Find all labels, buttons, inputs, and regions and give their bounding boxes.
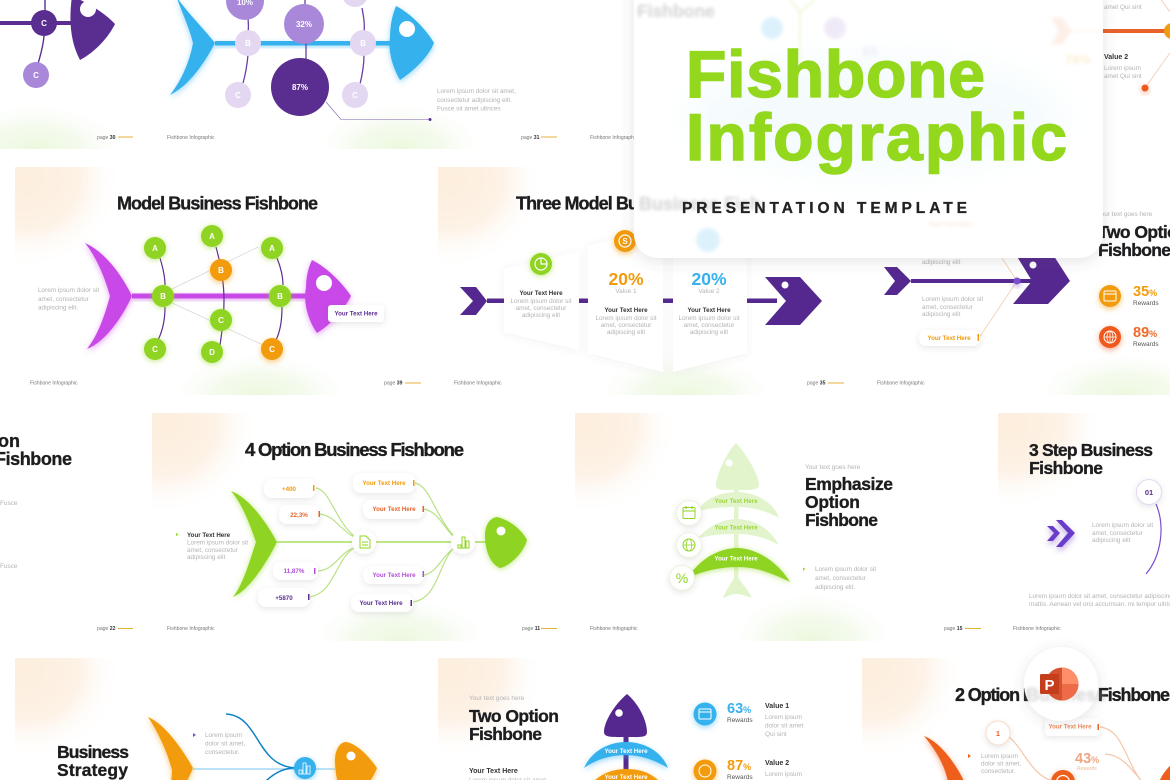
pill +5870: +5870 xyxy=(275,595,293,602)
orange rib xyxy=(590,769,664,780)
heading: Three Model Business Fishbone xyxy=(516,194,766,214)
text bottom: amet, consectetur xyxy=(922,304,974,311)
slide fragment: left heading row 3: Fusce xyxy=(0,563,18,570)
node 32% xyxy=(284,4,324,44)
label box: Your Text Here xyxy=(334,310,378,318)
side text: amet, consectetur xyxy=(38,296,90,303)
side text xyxy=(176,532,248,561)
slide: top right orange fishbone xyxy=(1103,0,1170,92)
node top right xyxy=(342,0,368,7)
head fragment xyxy=(1158,764,1170,780)
node C dark: C xyxy=(41,19,47,28)
side text: amet, consectetur xyxy=(187,547,239,554)
stat 35%: 35% xyxy=(1133,284,1157,300)
heading: Fishbone xyxy=(1098,240,1170,260)
stat 63% xyxy=(694,701,753,726)
head xyxy=(485,517,527,568)
icon: double chevron xyxy=(1047,520,1075,547)
arrow tail xyxy=(460,287,487,315)
PowerPoint badge xyxy=(1024,647,1106,721)
node B left: B xyxy=(245,39,251,48)
bullet text: Lorem ipsum dolor sit xyxy=(815,566,876,573)
pill 22,3%: 22,3% xyxy=(290,512,308,519)
blurred content behind card: Your Text Here xyxy=(928,221,972,228)
panel 3: Lorem ipsum dolor sit xyxy=(678,315,740,322)
highlighted rib xyxy=(688,548,790,582)
heading: Business xyxy=(57,742,129,762)
side text: Your Text Here xyxy=(187,532,231,539)
node C light: C xyxy=(33,71,39,80)
head xyxy=(335,742,377,780)
tail xyxy=(148,717,193,780)
icon: dollar xyxy=(614,230,636,252)
spine xyxy=(193,768,335,770)
text: dolor sit amet, xyxy=(205,740,245,748)
pills xyxy=(264,479,316,498)
label red: Your Text Here xyxy=(372,506,416,513)
subtitle: PRESENTATION TEMPLATE xyxy=(682,200,967,217)
callout text: Fusce sit amet ultrices xyxy=(437,106,501,112)
blurred content behind card: 78% xyxy=(1065,52,1091,67)
spine and bones xyxy=(38,0,45,64)
nodes: B xyxy=(277,292,283,301)
body text xyxy=(1029,593,1170,608)
arrow tail xyxy=(884,267,911,295)
panel 3: amet, consectetur xyxy=(684,322,735,329)
node xyxy=(1164,23,1170,39)
footer: Fishbone Infographic xyxy=(590,135,638,141)
spine xyxy=(277,541,486,543)
nodes: C xyxy=(218,316,224,325)
step 01: 01 xyxy=(1145,488,1153,497)
heading xyxy=(805,474,893,530)
slide: Two Option Fishbone (bottom) xyxy=(469,694,804,780)
bones xyxy=(158,247,283,345)
callout text xyxy=(437,88,516,112)
pills: +400 xyxy=(282,486,297,493)
value 2: Value 2 xyxy=(765,760,789,767)
skeleton xyxy=(697,443,779,598)
slide 30: purple fish fragment xyxy=(0,0,215,141)
footer xyxy=(590,626,981,632)
slide: Business Strategy fishbone xyxy=(57,714,377,780)
tail xyxy=(231,491,277,597)
bullet text: adipiscing elit. xyxy=(815,584,855,591)
node 87% xyxy=(271,58,329,116)
footer xyxy=(97,135,215,141)
footer: Fishbone Infographic xyxy=(877,380,925,386)
stat 43%: 43% xyxy=(1075,751,1099,767)
arrow head xyxy=(765,277,822,325)
text: adipiscing elit xyxy=(1092,537,1131,544)
spine xyxy=(1103,29,1170,33)
panel 1 xyxy=(504,252,579,350)
head xyxy=(305,260,351,333)
side text: adipiscing elit xyxy=(187,554,226,561)
footer: Fishbone Infographic xyxy=(30,380,78,386)
rib labels: Your Text Here xyxy=(714,498,758,505)
footer: page 15 xyxy=(944,626,963,632)
title glow xyxy=(685,55,1065,175)
node B right: B xyxy=(360,39,366,48)
panel 1: adipiscing elit xyxy=(522,312,560,319)
footer: page 11 xyxy=(522,626,540,632)
text: Your Text Here xyxy=(469,768,518,775)
footer: Fishbone Infographic xyxy=(1013,626,1061,632)
footer: page 39 xyxy=(384,380,403,386)
value 1: Lorem ipsum xyxy=(765,714,802,721)
blurred content behind card: adipiscing elit xyxy=(922,259,961,266)
slide: 3 Step Business Fishbone xyxy=(1013,440,1170,632)
label orange: Your Text Here xyxy=(362,480,406,487)
text: Your Text Here xyxy=(604,307,648,314)
text upper: amet Qui sint xyxy=(1104,4,1142,11)
value 2 xyxy=(1104,54,1142,80)
value 2 xyxy=(765,760,802,778)
value 1: dolor sit amet xyxy=(765,722,804,730)
tail xyxy=(924,736,968,780)
arrow head xyxy=(1013,250,1070,304)
node C light xyxy=(23,62,49,88)
value 2: Value 2 xyxy=(1104,54,1128,61)
title card xyxy=(634,0,1103,266)
stat 89%: Rewards xyxy=(1133,341,1159,348)
label purple: Your Text Here xyxy=(359,600,403,607)
value 1: Value 1 xyxy=(765,703,789,710)
nodes: A xyxy=(269,244,275,253)
panel 1: Lorem ipsum dolor sit xyxy=(510,298,572,305)
footer: Fishbone Infographic xyxy=(167,626,215,632)
panel 2: amet, consectetur xyxy=(601,322,652,329)
nodes: C xyxy=(152,345,158,354)
tail xyxy=(170,0,215,95)
text bottom: Lorem ipsum dolor sit xyxy=(922,296,983,303)
kicker: Your text goes here xyxy=(469,695,525,702)
value 2: Lorem ipsum xyxy=(765,771,802,778)
heading: Fishbone xyxy=(805,510,878,530)
pill 11,87%: 11,87% xyxy=(284,568,305,575)
text: Your Text Here xyxy=(687,307,731,314)
leader lines xyxy=(979,255,1017,338)
step 1 xyxy=(986,721,1010,745)
heading xyxy=(57,742,129,780)
footer: Fishbone Infographic xyxy=(590,626,638,632)
nodes: B xyxy=(218,266,224,275)
node B right xyxy=(350,30,376,56)
text: Lorem ipsum dolor sit xyxy=(1092,522,1153,529)
text xyxy=(193,732,245,756)
kicker: Your text goes here xyxy=(805,464,861,471)
slide: 2 Option Business Fishbone xyxy=(924,685,1170,780)
side text: Lorem ipsum dolor sit xyxy=(38,287,99,294)
node xyxy=(1051,770,1075,780)
nodes: D xyxy=(209,348,215,357)
node C left xyxy=(225,82,251,108)
callout leader xyxy=(326,102,432,121)
curves xyxy=(1009,727,1145,780)
text: Lorem ipsum xyxy=(981,753,1018,760)
callout text: consectetur adipiscing elit. xyxy=(437,97,512,104)
text: Your Text Here xyxy=(519,290,563,297)
slide: Three Model Business Fishbone xyxy=(454,194,844,386)
panel 3: adipiscing elit xyxy=(690,329,728,336)
text: amet, consectetur xyxy=(1092,530,1144,537)
text: consectetur. xyxy=(205,749,240,756)
head xyxy=(604,694,647,737)
spine xyxy=(911,279,1036,283)
value: 20% xyxy=(608,269,644,289)
footer: page 35 xyxy=(807,380,826,386)
footer: page 30 xyxy=(97,135,116,141)
stat 87%: 87% xyxy=(727,758,751,774)
node B left xyxy=(235,30,261,56)
panel 3 xyxy=(673,240,747,372)
text xyxy=(968,753,1021,775)
label box xyxy=(1045,718,1100,736)
panel 3: Value 2 xyxy=(698,288,720,295)
kicker: Your text goes here xyxy=(1097,211,1153,218)
rib labels xyxy=(714,498,758,562)
heading: 2 Option Business Fishbone xyxy=(955,685,1170,705)
blurred content behind card: 65 xyxy=(862,43,878,59)
nodes: A xyxy=(152,244,158,253)
side text xyxy=(38,287,99,312)
grey links xyxy=(170,247,263,345)
bullet text xyxy=(803,566,876,591)
label box: Your Text Here xyxy=(927,335,971,342)
slide fragment: left heading row 3: Fusce xyxy=(0,500,18,507)
panel 1: amet, consectetur xyxy=(516,305,567,312)
heading: 4 Option Business Fishbone xyxy=(245,439,464,460)
stat 89% xyxy=(1099,325,1159,348)
label red xyxy=(363,500,424,519)
label orange xyxy=(353,473,415,493)
slide fragment: left heading row 3: page 22 xyxy=(97,626,116,632)
footer xyxy=(167,626,557,632)
footer xyxy=(521,135,638,141)
heading: Option xyxy=(805,492,860,512)
icon: percent xyxy=(670,566,694,590)
step 1: 1 xyxy=(996,729,1000,738)
label box: Your Text Here xyxy=(1048,724,1092,730)
blue rib: Your Text Here xyxy=(604,748,648,755)
heading: Fishbone xyxy=(1029,458,1103,478)
footer: Fishbone Infographic xyxy=(167,135,215,141)
heading: Fishbone xyxy=(469,724,542,744)
blurred content behind card: Fishbone xyxy=(637,1,715,21)
value 2: Lorem ipsum xyxy=(1104,65,1141,72)
text: consectetur. xyxy=(981,768,1016,775)
tail xyxy=(85,243,132,349)
title: Infographic xyxy=(686,100,1067,174)
stat 35% xyxy=(1099,284,1159,307)
label box xyxy=(328,305,384,322)
node C dark xyxy=(31,10,57,36)
text: Lorem ipsum xyxy=(205,732,242,739)
spine xyxy=(487,298,777,303)
blue rib xyxy=(584,742,668,768)
node doc xyxy=(352,530,376,554)
node C right xyxy=(342,82,368,108)
heading: Model Business Fishbone xyxy=(117,194,318,214)
slide fragment: left heading row 3 xyxy=(0,431,133,632)
nodes: C xyxy=(269,345,275,354)
spine xyxy=(624,735,628,780)
slide: Model Business Fishbone xyxy=(30,194,421,386)
panel 2 xyxy=(588,228,663,372)
blurred content behind card xyxy=(637,0,1103,266)
pill 11,87% xyxy=(273,562,318,580)
label pink: Your Text Here xyxy=(372,572,416,579)
slide: Two Option Fishbone (right edge) xyxy=(1097,211,1170,348)
nodes: A xyxy=(209,232,215,241)
leader xyxy=(1145,0,1170,88)
curve xyxy=(1146,504,1161,574)
stat 63%: Rewards xyxy=(727,717,753,724)
side text: adipiscing elit. xyxy=(38,304,78,312)
stat 87% xyxy=(694,758,753,780)
nodes xyxy=(144,225,291,363)
stat 35%: Rewards xyxy=(1133,300,1159,307)
curves xyxy=(310,483,453,602)
heading xyxy=(469,706,559,744)
footer xyxy=(30,380,421,386)
icon: dollar: S xyxy=(622,237,628,246)
blurred content behind card: Business Fish xyxy=(639,194,761,214)
heading xyxy=(1029,440,1153,478)
bullet text: amet, consectetur xyxy=(815,575,867,582)
slide: purple arrow fishbone xyxy=(877,250,1070,386)
dot xyxy=(1142,84,1148,92)
pill 22,3% xyxy=(279,505,320,524)
text xyxy=(1092,522,1153,544)
label box xyxy=(919,330,980,346)
value 1: Qui sint xyxy=(765,731,787,738)
stat 43%: Rewards xyxy=(1077,766,1097,772)
step 01 xyxy=(1136,480,1162,504)
heading: 3 Step Business xyxy=(1029,440,1153,460)
spine xyxy=(132,294,307,298)
value 1 xyxy=(765,703,804,738)
heading: Strategy xyxy=(57,760,128,780)
node chart xyxy=(451,530,475,554)
icon: calendar xyxy=(676,500,702,526)
icon: globe xyxy=(676,532,702,558)
value 2: amet Qui sint xyxy=(1104,73,1142,80)
callout text: Lorem ipsum dolor sit amet, xyxy=(437,88,516,95)
node 32%: 32% xyxy=(296,20,312,29)
heading: Two Option xyxy=(469,706,559,726)
head xyxy=(389,6,434,80)
card surface xyxy=(634,0,1103,258)
nodes: B xyxy=(160,292,166,301)
heading xyxy=(1098,222,1170,260)
stat 63%: 63% xyxy=(727,701,751,717)
icon: PowerPoint logo: P xyxy=(1044,677,1055,694)
stat 89%: 89% xyxy=(1133,325,1157,341)
bones xyxy=(243,0,364,84)
footer: page 31 xyxy=(521,135,540,141)
blurred heading behind badge: Business xyxy=(1026,685,1106,705)
icon: percent: % xyxy=(676,570,688,586)
spine xyxy=(215,41,393,46)
text xyxy=(469,768,546,780)
slide: 4 Option Business Fishbone xyxy=(167,439,557,632)
slide: Emphasize Option Fishbone xyxy=(590,443,981,632)
title: Fishbone xyxy=(686,37,985,111)
slide 31: blue fish with percentage nodes xyxy=(170,0,638,141)
node C left: C xyxy=(235,91,241,100)
pill +5870 xyxy=(258,588,310,607)
value: 20% xyxy=(691,269,727,289)
panel 2: adipiscing elit xyxy=(607,329,645,336)
title xyxy=(686,37,1067,174)
footer xyxy=(454,380,844,386)
nodes xyxy=(226,0,264,20)
curves xyxy=(226,714,295,780)
panel 2: Lorem ipsum dolor sit xyxy=(595,315,657,322)
label purple xyxy=(351,594,413,612)
footer: Fishbone Infographic xyxy=(454,380,502,386)
rib labels: Your Text Here xyxy=(714,524,758,532)
side text: Lorem ipsum dolor sit xyxy=(187,540,248,546)
label pink xyxy=(363,566,424,584)
heading: Emphasize xyxy=(805,474,893,494)
fish head xyxy=(70,0,115,60)
node 87%: 87% xyxy=(292,83,308,92)
node C right: C xyxy=(352,91,358,100)
text bottom xyxy=(922,296,983,318)
panel 2: Value 1 xyxy=(615,288,637,295)
text: dolor sit amet, xyxy=(981,760,1021,768)
text bottom: adipiscing elit xyxy=(922,311,961,318)
icon: pie xyxy=(530,253,552,275)
node xyxy=(1014,278,1020,284)
node xyxy=(294,757,316,779)
text top: adipiscing elit xyxy=(922,259,961,266)
rib labels: Your Text Here xyxy=(714,556,758,562)
